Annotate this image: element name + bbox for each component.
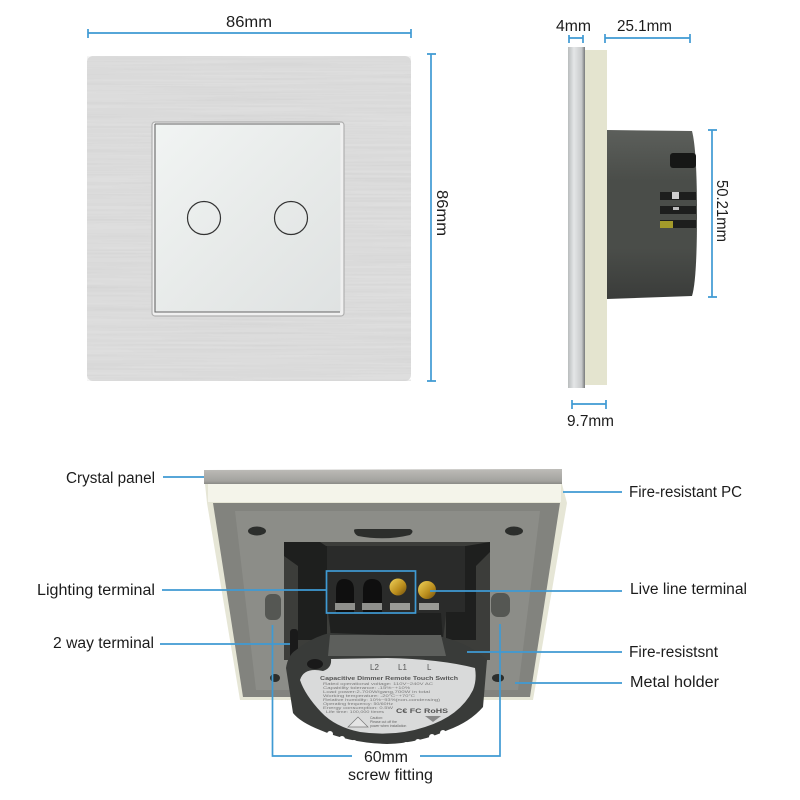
dimension: 25.1mm: [605, 18, 690, 43]
spec label: L: [427, 663, 432, 672]
round module: [286, 633, 487, 750]
side latch: [290, 629, 298, 659]
teeth notches: [327, 730, 446, 750]
label: 2 way terminal: 2 way terminal: [53, 635, 154, 652]
touch button right: [274, 202, 308, 234]
dimension: 4mm: 4mm: [556, 18, 591, 35]
dimension: 25.1mm: 25.1mm: [617, 18, 672, 35]
spec label: L2: [370, 663, 379, 672]
spec label: Operating frequency: 50/60Hz: [323, 702, 393, 706]
fire-resistant frame: [205, 484, 567, 700]
side view: switch profile: [568, 47, 697, 388]
touch button left: [188, 202, 220, 234]
spec label: Capability tolerance: -15%~+10%: [323, 686, 411, 690]
black terminal housing: [284, 542, 490, 660]
dimension: width 86mm: [88, 14, 411, 38]
spec label: power when installation: [370, 724, 406, 728]
label: Lighting terminal: [37, 571, 416, 613]
label: Metal holder: Metal holder: [630, 674, 719, 691]
dimension: 60mm screw fitting: screw fitting: [348, 767, 433, 784]
spec label: Rated operational voltage: 110V~240V AC: [323, 682, 433, 686]
spec label: Working temperature: -20°C~+70°C: [323, 694, 415, 698]
terminal block: [328, 572, 446, 640]
spec label: [300, 658, 476, 734]
dimension: width 86mm: 86mm: [226, 14, 272, 31]
mounting holes: [248, 526, 523, 682]
brass screw L1: [390, 578, 406, 596]
crystal panel edge: [204, 469, 562, 484]
dimension: 9.7mm: 9.7mm: [567, 413, 614, 430]
label: Live line terminal: Live line terminal: [630, 581, 747, 598]
spec label: Energy consumption: 0.5W: [323, 706, 394, 710]
dimension: 4mm: [556, 18, 591, 43]
rear view: switch back: [204, 469, 567, 750]
front view: switch plate: [87, 56, 411, 381]
label: Fire-resistant PC: Fire-resistant PC: [629, 484, 742, 501]
dimension: 50.21mm: [708, 130, 730, 297]
spec label: Load power:2-700W/gang,700W in total: [323, 690, 430, 694]
dimension: 60mm screw fitting: 60mm: [364, 749, 408, 766]
dimension: 50.21mm: 50.21mm: [713, 180, 730, 242]
metal holder plate: [213, 503, 560, 697]
label: Crystal panel: Crystal panel: [66, 470, 155, 487]
side view: dark module body: [607, 130, 697, 299]
spec label: Caution:: [370, 716, 383, 720]
brass screw L: [418, 581, 436, 599]
spec label: Relative humidity: 10%~93%(non-condensing): [323, 698, 441, 702]
spec label: Life time: 100,000 times: [326, 710, 384, 714]
dimension: height 86mm: [427, 54, 450, 381]
spec label: Capacitive Dimmer Remote Touch Switch: [320, 676, 459, 682]
label: Crystal panel: [66, 470, 204, 487]
spec label: Please cut off the: [370, 720, 397, 724]
label: Lighting terminal: Lighting terminal: [37, 582, 155, 599]
spec label: C€ FC RoHS: [396, 709, 448, 715]
dimension: height 86mm: 86mm: [433, 190, 450, 236]
glass touch panel: [152, 122, 344, 316]
dimension: 9.7mm: [567, 400, 614, 430]
spec label: L1: [398, 663, 407, 672]
label: Fire-resistsnt: Fire-resistsnt: [629, 644, 719, 661]
dimension: 60mm screw fitting: [272, 624, 500, 784]
screw slots: [265, 593, 510, 620]
